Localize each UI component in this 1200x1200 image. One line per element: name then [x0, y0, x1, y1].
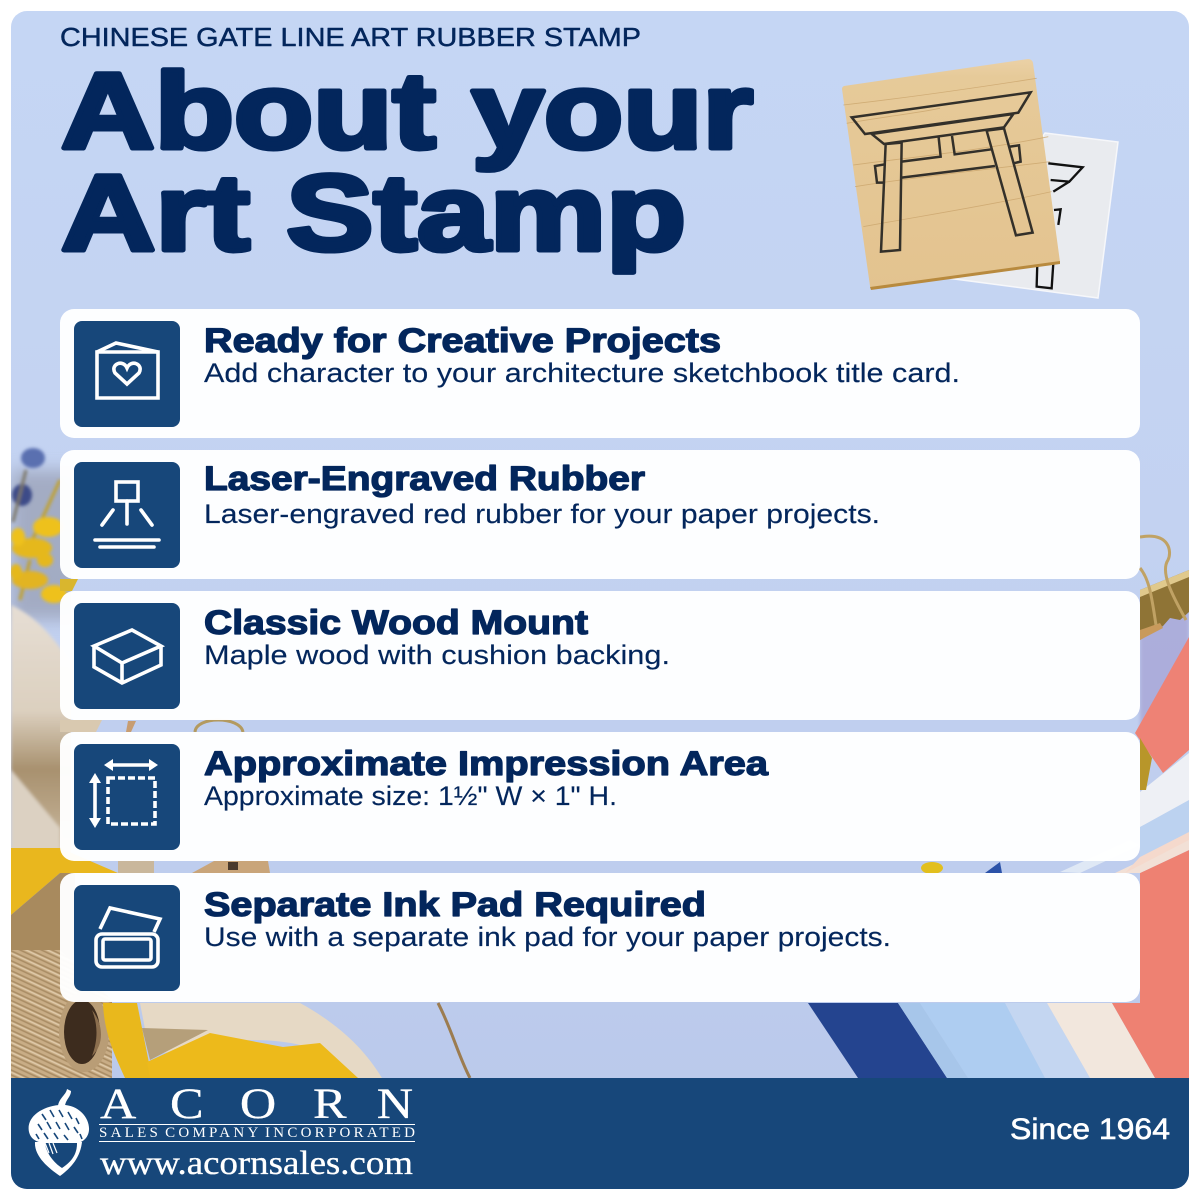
wood block	[842, 59, 1060, 288]
logo wordmark: www.acornsales.com	[100, 1145, 413, 1182]
feature row: impression area	[60, 732, 1140, 861]
heading: Approximate Impression Area	[204, 745, 769, 783]
description: Approximate size: 1½" W × 1" H.	[204, 781, 617, 811]
heading: Separate Ink Pad Required	[204, 886, 706, 924]
feature row: laser engraved	[60, 450, 1140, 579]
photo: ribbon and twine	[11, 848, 470, 1078]
icon: acorn logo	[29, 1089, 89, 1176]
title: About your	[61, 50, 753, 171]
description: Maple wood with cushion backing.	[204, 640, 670, 670]
icon: dimensions	[74, 744, 180, 850]
logo wordmark: SALES COMPANY INCORPORATED	[99, 1125, 415, 1141]
feature row: creative projects	[60, 309, 1140, 438]
icon: wood block	[74, 603, 180, 709]
photo: gold binder clip	[1140, 536, 1189, 640]
logo wordmark: ACORN	[100, 1080, 413, 1128]
icon: laser engraver	[74, 462, 180, 568]
logo wordmark	[99, 1080, 415, 1182]
subtitle: CHINESE GATE LINE ART RUBBER STAMP	[60, 22, 641, 52]
title: Art Stamp	[61, 152, 686, 273]
footer band	[11, 1078, 1189, 1189]
icon: ink pad	[74, 885, 180, 991]
icon: greeting card with heart	[74, 321, 180, 427]
photo: coloured paper stack	[808, 637, 1189, 1078]
heading: Classic Wood Mount	[204, 604, 588, 642]
heading: Laser-Engraved Rubber	[204, 460, 645, 498]
description: Laser-engraved red rubber for your paper projects.	[204, 499, 880, 529]
description: Add character to your architecture sketchbook title card.	[204, 358, 960, 388]
stamp product photo	[842, 59, 1118, 298]
feature row: wood mount	[60, 591, 1140, 720]
feature row: ink pad	[60, 873, 1140, 1002]
printed paper sample	[947, 133, 1118, 298]
heading: Ready for Creative Projects	[204, 322, 721, 360]
description: Use with a separate ink pad for your paper projects.	[204, 922, 891, 952]
torii gate line art	[852, 92, 1033, 252]
title	[61, 50, 753, 273]
tagline: Since 1964	[1010, 1113, 1170, 1146]
